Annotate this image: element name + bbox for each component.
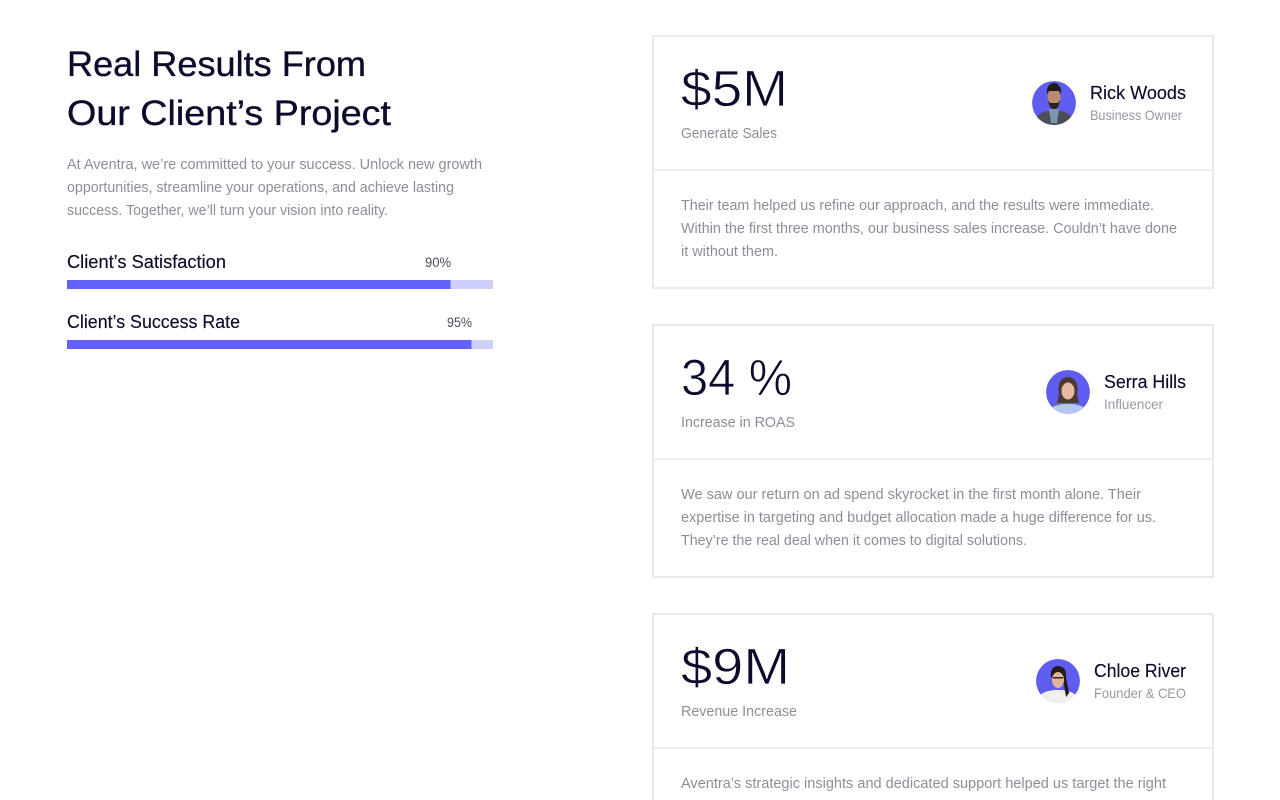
testimonial text: Their team helped us refine our approach, and the results were immediate.: [681, 197, 1154, 214]
testimonial text: Aventra’s strategic insights and dedicated support helped us target the right: [681, 775, 1167, 792]
testimonial text: [681, 486, 1156, 549]
intro paragraph: [67, 156, 482, 219]
role: Founder & CEO: [1094, 685, 1186, 701]
progress bar: client's success rate 95%: Client’s Success Rate: [67, 312, 240, 332]
intro paragraph: success. Together, we’ll turn your vision into reality.: [67, 202, 388, 219]
icon: avatar Chloe River: [1036, 659, 1080, 705]
metric label: Revenue Increase: [681, 703, 797, 720]
testimonial text: Within the first three months, our business sales increase. Couldn’t have done: [681, 220, 1177, 237]
metric: $9M: $9M: [681, 638, 790, 695]
name: Rick Woods: [1090, 83, 1186, 103]
title: [67, 45, 391, 133]
progress bar: client's success rate 95%: 95%: [447, 314, 472, 330]
role: Influencer: [1104, 396, 1163, 412]
progress bar: client's success rate 95%: [67, 312, 493, 349]
metric label: Generate Sales: [681, 125, 777, 142]
testimonial text: [681, 197, 1177, 260]
progress bar: client's satisfaction 90%: 90%: [425, 254, 451, 270]
name: Chloe River: [1094, 661, 1186, 681]
metric: $5M: $5M: [681, 60, 788, 117]
panel: testimonial card Serra Hills: [653, 325, 1213, 577]
intro paragraph: At Aventra, we’re committed to your success. Unlock new growth: [67, 156, 482, 173]
testimonial text: We saw our return on ad spend skyrocket in the first month alone. Their: [681, 486, 1141, 503]
icon: avatar Serra Hills: [1046, 370, 1090, 416]
metric: 34 %: 34 %: [681, 349, 792, 406]
progress bar: client's satisfaction 90%: Client’s Satisfaction: [67, 252, 226, 272]
title: Real Results From: [67, 45, 366, 84]
progress bar: client's satisfaction 90%: [67, 252, 493, 289]
metric label: Increase in ROAS: [681, 414, 795, 431]
panel: testimonial card Rick Woods: [653, 36, 1213, 288]
role: Business Owner: [1090, 107, 1182, 123]
intro paragraph: opportunities, streamline your operations, and achieve lasting: [67, 179, 454, 196]
panel: intro and progress: [67, 45, 493, 349]
testimonial text: expertise in targeting and budget allocation made a huge difference for us.: [681, 509, 1156, 526]
testimonial text: it without them.: [681, 243, 778, 260]
title: Our Client’s Project: [67, 94, 391, 133]
icon: avatar Rick Woods: [1032, 81, 1076, 125]
panel: testimonial card Chloe River: [653, 614, 1213, 800]
name: Serra Hills: [1104, 372, 1186, 392]
testimonial text: They’re the real deal when it comes to digital solutions.: [681, 532, 1027, 549]
